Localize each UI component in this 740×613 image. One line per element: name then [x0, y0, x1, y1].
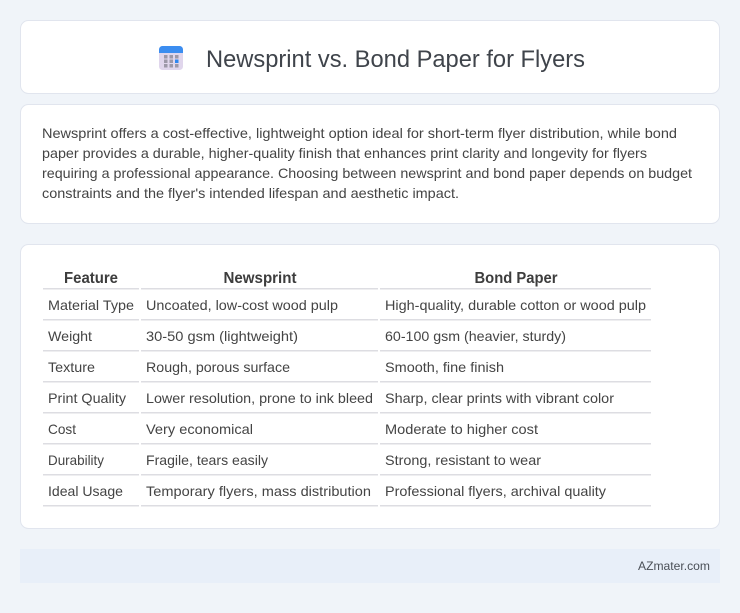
- row: material type: [48, 297, 646, 313]
- row: weight: 30-50 gsm (lightweight): [146, 328, 298, 344]
- row: weight: Weight: [48, 328, 92, 344]
- panel: title card: [20, 20, 720, 94]
- table header: Bond Paper: [474, 270, 558, 287]
- panel: summary: [20, 104, 720, 224]
- row: texture: Texture: [48, 359, 95, 375]
- summary text: paper provides a durable, higher-quality finish that enhances print clarity and longevity for flyers: [42, 145, 647, 161]
- row: weight: 60-100 gsm (heavier, sturdy): [385, 328, 566, 344]
- row: print quality: [48, 390, 614, 406]
- row: cost: Cost: [48, 421, 76, 437]
- summary text: constraints and the flyer's intended lifespan and aesthetic impact.: [42, 185, 459, 201]
- row: texture: Smooth, fine finish: [385, 359, 504, 375]
- row: material type: Material Type: [48, 297, 134, 313]
- row: print quality: Print Quality: [48, 390, 126, 406]
- panel: comparison table: [20, 244, 720, 528]
- table header: [64, 270, 558, 287]
- row: durability: [48, 452, 541, 468]
- row: material type: Uncoated, low-cost wood pulp: [146, 297, 338, 313]
- icon: calendar: [159, 46, 183, 70]
- table rules: [43, 288, 651, 506]
- summary text: requiring a professional appearance. Choosing between newsprint and bond paper depends on budget: [42, 165, 692, 181]
- row: durability: Fragile, tears easily: [146, 452, 268, 468]
- table header: Newsprint: [224, 270, 297, 287]
- title: Newsprint vs. Bond Paper for Flyers: [206, 46, 585, 73]
- row: print quality: Sharp, clear prints with vibrant color: [385, 390, 614, 406]
- row: durability: Durability: [48, 452, 104, 468]
- summary text: [42, 125, 692, 201]
- row: print quality: Lower resolution, prone to ink bleed: [146, 390, 373, 406]
- table header: Feature: [64, 270, 118, 287]
- footer: [20, 549, 720, 583]
- row: cost: [48, 421, 538, 437]
- row: texture: [48, 359, 504, 375]
- row: weight: [48, 328, 566, 344]
- row: ideal usage: [48, 483, 606, 499]
- row: ideal usage: Professional flyers, archival quality: [385, 483, 606, 499]
- footer credit: AZmater.com: [638, 559, 710, 573]
- row: ideal usage: Ideal Usage: [48, 483, 123, 499]
- row: cost: Very economical: [146, 421, 253, 437]
- row: material type: High-quality, durable cotton or wood pulp: [385, 297, 646, 313]
- summary text: Newsprint offers a cost-effective, lightweight option ideal for short-term flyer distribution, while bond: [42, 125, 677, 141]
- row: durability: Strong, resistant to wear: [385, 452, 541, 468]
- row: ideal usage: Temporary flyers, mass distribution: [146, 483, 371, 499]
- row: cost: Moderate to higher cost: [385, 421, 538, 437]
- row: texture: Rough, porous surface: [146, 359, 290, 375]
